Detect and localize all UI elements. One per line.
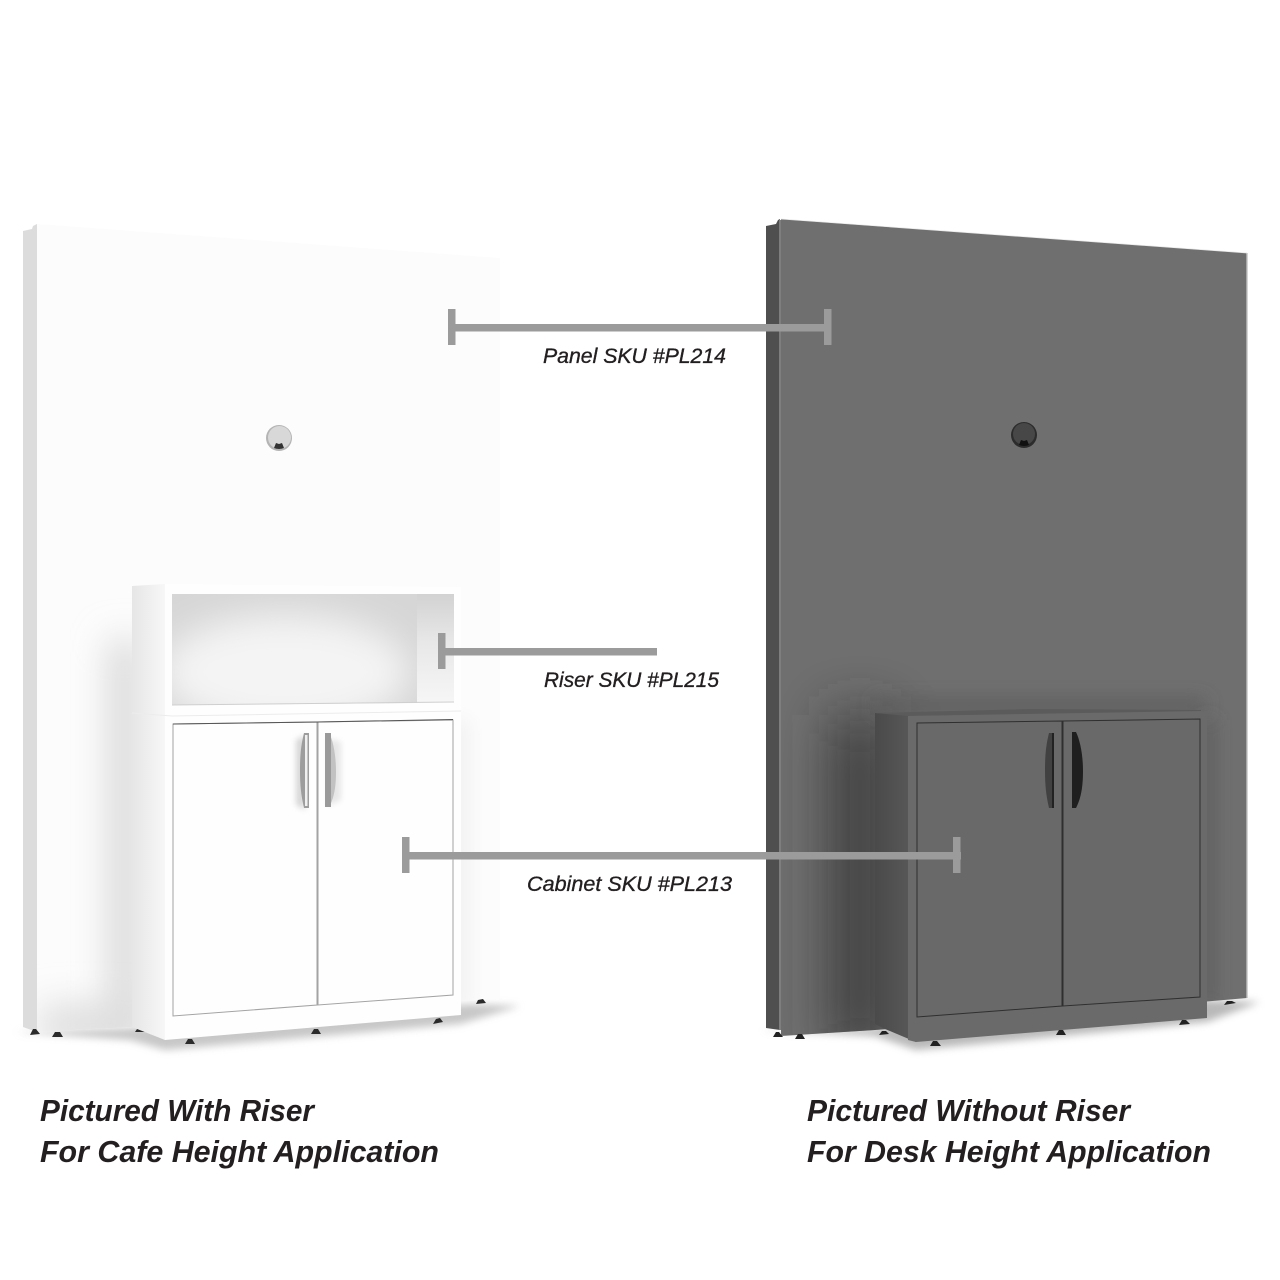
grey panel front — [781, 219, 1247, 1036]
caption: without riser — [807, 1093, 1211, 1169]
left door handle — [296, 733, 309, 810]
cabinet front frame — [908, 711, 1207, 1042]
caption: without riser: Pictured Without Riser — [807, 1093, 1132, 1128]
white panel front — [37, 224, 500, 1032]
cabinet shadow on white panel — [40, 640, 467, 1045]
cabinet shadow on grey panel — [835, 700, 1213, 1055]
cable grommet: white panel — [266, 425, 292, 451]
grey panel side edge — [766, 219, 780, 1030]
white panel feet — [30, 999, 486, 1037]
grey panel feet — [773, 1001, 1236, 1039]
connector: cabinet SKU — [402, 837, 961, 873]
caption: with riser — [40, 1093, 439, 1169]
label: panel SKU: Panel SKU #PL214 — [543, 345, 726, 368]
left door handle — [1045, 733, 1054, 808]
cabinet feet — [185, 1018, 443, 1044]
left door — [173, 722, 317, 1016]
right door — [318, 720, 453, 1005]
cabinet front frame — [165, 584, 461, 1040]
cabinet top — [875, 709, 1201, 716]
riser seam — [132, 711, 461, 716]
label: cabinet SKU: Cabinet SKU #PL213 — [527, 873, 732, 896]
riser opening — [172, 594, 454, 706]
left door — [917, 721, 1062, 1017]
cabinet side — [875, 713, 916, 1042]
floor shadow under grey panel — [760, 1000, 1260, 1050]
panel: grey unit without riser — [760, 219, 1260, 1055]
cable grommet: grey panel — [1011, 422, 1037, 448]
right door — [1063, 719, 1200, 1006]
cabinet feet — [930, 1020, 1190, 1046]
connector: riser SKU — [438, 633, 657, 669]
panel: white unit with riser — [15, 224, 520, 1050]
white panel side edge — [23, 224, 37, 1032]
right door handle — [1072, 732, 1083, 808]
caption: with riser: Pictured With Riser — [40, 1093, 316, 1128]
label: riser SKU: Riser SKU #PL215 — [544, 669, 719, 692]
floor shadow under white panel — [15, 1004, 520, 1050]
caption: without riser: For Desk Height Application — [807, 1134, 1211, 1169]
right door handle — [325, 733, 341, 807]
cabinet side — [132, 584, 165, 1040]
connector: panel SKU — [448, 309, 832, 345]
white cabinet with riser — [132, 584, 461, 1044]
grey cabinet — [875, 709, 1207, 1046]
caption: with riser: For Cafe Height Application — [40, 1134, 439, 1169]
